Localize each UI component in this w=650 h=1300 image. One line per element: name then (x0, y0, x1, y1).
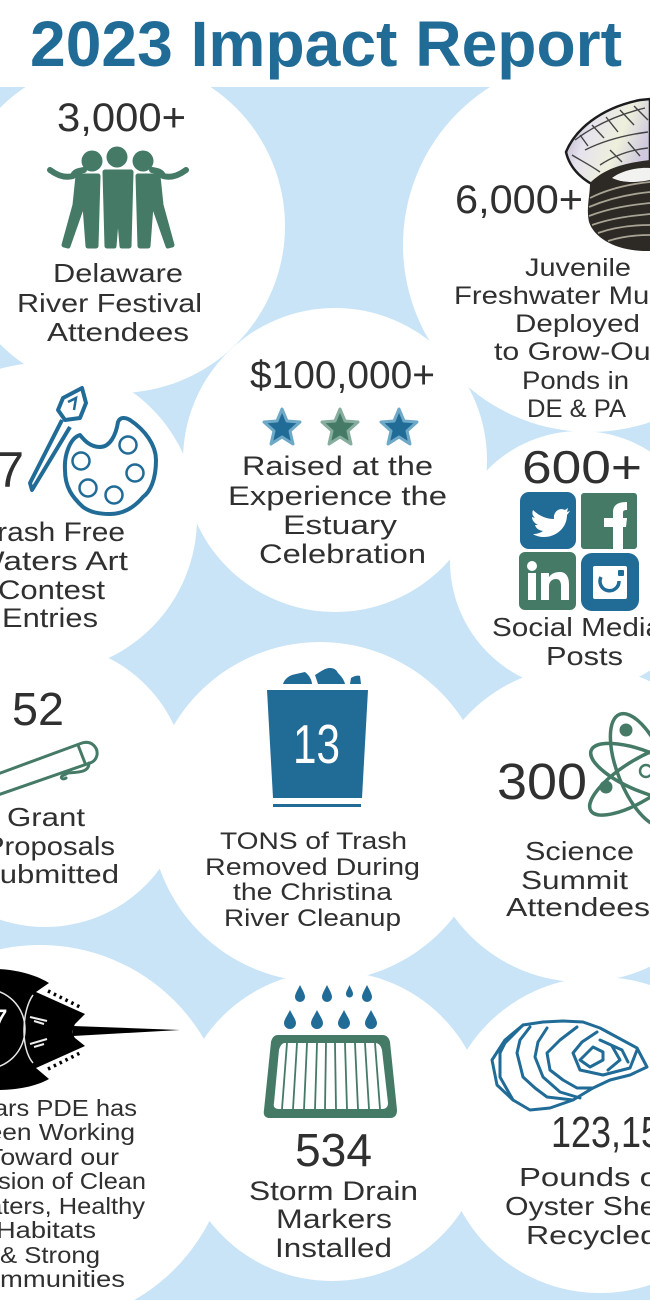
social media label: Social Media (492, 612, 650, 642)
trash label: River Cleanup (224, 905, 401, 932)
storm drain label: Storm Drain (249, 1176, 418, 1206)
panel: grant proposals (0, 683, 119, 889)
science number: 300 (497, 753, 587, 810)
fundraising number: $100,000+ (250, 354, 435, 397)
fundraising label (228, 451, 447, 569)
years label (0, 1095, 146, 1292)
science label: Science (525, 836, 634, 866)
panel: storm drain markers (249, 985, 418, 1263)
icon: horseshoe crab (0, 969, 180, 1090)
icon: storm drain grate (264, 1035, 397, 1118)
icon: instagram tile (581, 553, 639, 611)
icon: linkedin tile (519, 552, 576, 610)
oyster label: Recycled (526, 1220, 650, 1250)
icon: three stars (264, 409, 417, 444)
fundraising label: Experience the (228, 481, 447, 511)
trash label (205, 828, 420, 932)
icon: paintbrush and palette (30, 388, 156, 514)
icon: atom (580, 705, 650, 835)
fundraising label: Celebration (259, 539, 426, 569)
mussel label: Juvenile (525, 254, 631, 282)
trash tons number: 13 (293, 713, 340, 775)
storm drain number: 534 (295, 1124, 372, 1176)
mussel label: to Grow-Out (494, 338, 650, 366)
years label: & Strong (0, 1242, 100, 1268)
storm drain label: Markers (276, 1204, 392, 1234)
icon: oyster shell (492, 1021, 647, 1110)
panel: fundraising celebration (228, 354, 447, 569)
mussel label (454, 254, 650, 423)
panel: trash cleanup (205, 668, 420, 932)
social media number: 600+ (522, 441, 642, 493)
grant label (0, 802, 119, 889)
festival label: Attendees (47, 317, 189, 347)
science label: Attendees (506, 892, 650, 922)
icon: pen (0, 742, 97, 796)
storm drain label (249, 1176, 418, 1263)
social media label: Posts (546, 641, 623, 671)
art contest label: Contest (0, 575, 106, 605)
festival label: Delaware (53, 258, 183, 288)
festival number: 3,000+ (57, 96, 186, 140)
storm drain label: Installed (275, 1233, 392, 1263)
panel: freshwater mussels (454, 99, 650, 423)
grant number: 52 (12, 683, 64, 735)
oyster label (505, 1162, 650, 1250)
icon: three people embracing (50, 146, 186, 246)
festival label: River Festival (17, 288, 202, 318)
oyster label: Oyster Shell (505, 1191, 650, 1221)
grant label: Grant (7, 802, 86, 832)
mussel label: Ponds in (522, 367, 629, 395)
icon: twitter tile (520, 492, 576, 549)
panel: art contest (0, 388, 156, 633)
art contest label (0, 517, 129, 633)
mussel label: DE & PA (527, 395, 626, 423)
mussel number: 6,000+ (455, 178, 583, 222)
trash label: the Christina (233, 879, 393, 906)
icon: rain drops (284, 985, 377, 1029)
art contest label: Entries (2, 603, 98, 633)
icon: facebook tile (581, 493, 637, 549)
science label (506, 836, 650, 922)
title: 2023 Impact Report (30, 8, 622, 80)
icon: mussel shells (566, 99, 650, 251)
panel: oyster shells (492, 1021, 650, 1250)
science label: Summit (521, 865, 629, 895)
trash label: Removed During (205, 854, 420, 881)
panel: science summit (497, 705, 650, 922)
mussel label: Deployed (515, 310, 640, 338)
oyster label: Pounds of (519, 1162, 650, 1192)
panel: years working (0, 969, 180, 1292)
fundraising label: Raised at the (242, 451, 433, 481)
panel: festival attendees (17, 96, 202, 347)
social media label (492, 612, 650, 671)
icon: trash bucket with number (267, 668, 368, 807)
panel: social media (492, 441, 650, 671)
festival label (17, 258, 202, 347)
fundraising label: Estuary (283, 510, 398, 540)
trash label: TONS of Trash (220, 828, 407, 855)
